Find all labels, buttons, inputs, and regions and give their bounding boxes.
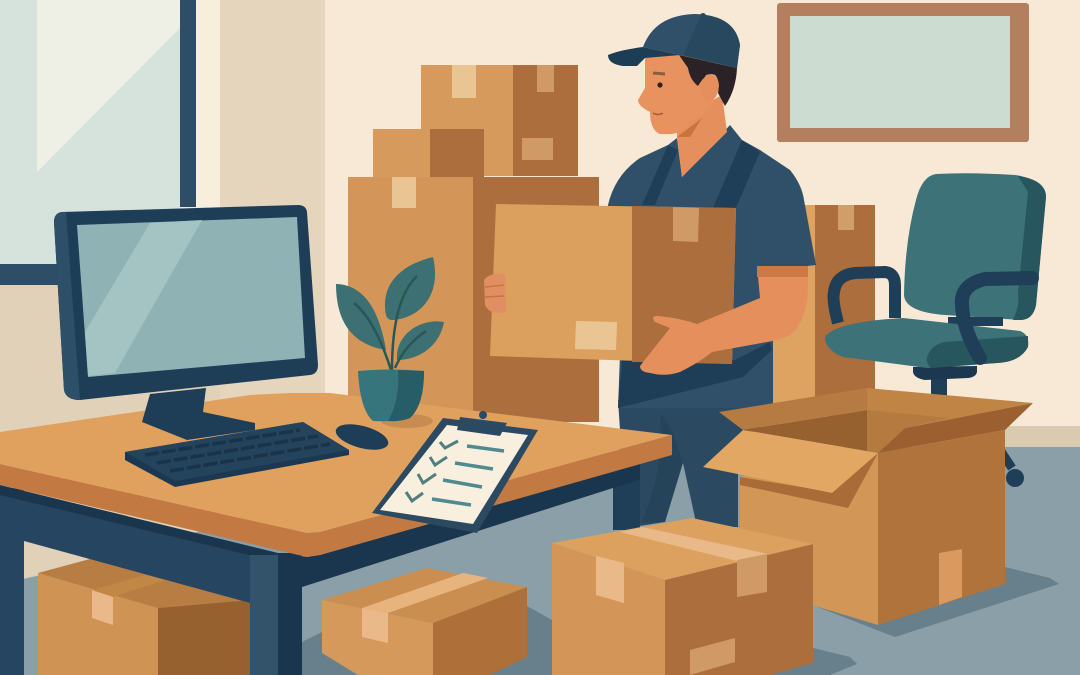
cap visor [608, 47, 680, 66]
floor box front [552, 518, 813, 675]
legs [613, 400, 773, 530]
clipboard [372, 411, 538, 533]
carried box [490, 204, 736, 364]
desk apron [0, 435, 672, 557]
cap crown [643, 14, 740, 68]
mouse [333, 419, 391, 455]
wall picture frame [777, 3, 1029, 142]
hair [679, 55, 737, 106]
large box [348, 177, 599, 422]
desk top [0, 393, 672, 533]
left beam [0, 490, 278, 603]
hands and arm [484, 266, 808, 375]
office chair [825, 173, 1046, 487]
worker [608, 13, 816, 530]
small box [373, 129, 484, 177]
top box [421, 65, 578, 176]
floor box left [38, 559, 250, 675]
floor box center [322, 568, 527, 675]
left desk leg [0, 488, 24, 675]
ear [700, 74, 719, 102]
box behind worker right [770, 205, 875, 405]
front desk leg [250, 555, 278, 675]
face details [653, 73, 665, 74]
shirt [608, 125, 816, 408]
head [638, 54, 714, 134]
back box stack [348, 65, 599, 422]
desk [0, 393, 672, 675]
monitor [54, 205, 318, 440]
neck [677, 95, 727, 177]
window [0, 0, 196, 285]
right beam [278, 463, 640, 592]
floor shadows [302, 567, 1059, 675]
potted plant [336, 257, 444, 428]
floor [0, 447, 1080, 675]
right desk leg [613, 480, 640, 530]
keyboard [125, 422, 349, 487]
open box right [703, 388, 1033, 625]
